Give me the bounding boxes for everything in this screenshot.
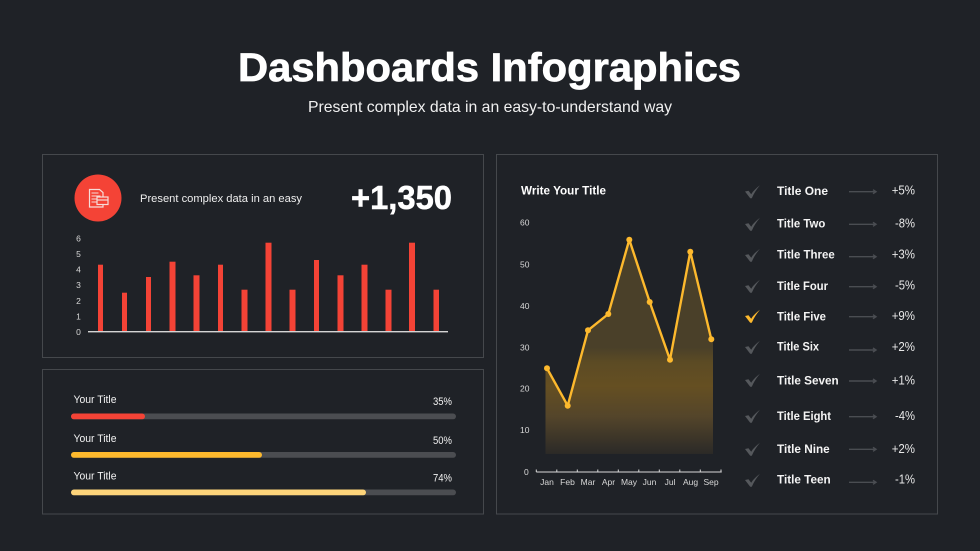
progress row 74% <box>71 470 456 495</box>
list row: Title Six <box>745 340 915 354</box>
list row: Title Seven <box>745 373 915 387</box>
y axis labels: 0 <box>76 327 81 337</box>
x axis <box>536 470 722 472</box>
y axis labels: 20 <box>520 384 530 394</box>
x axis labels: May <box>621 477 638 487</box>
y axis labels: 6 <box>76 234 81 244</box>
y axis labels: 5 <box>76 249 81 259</box>
y axis labels: 1 <box>76 312 81 322</box>
progress row 35% <box>71 394 456 419</box>
progress row 35%: Your Title <box>74 394 116 406</box>
list row: Title Three: Title Three <box>777 247 835 261</box>
list row: Title Seven: Title Seven <box>777 373 839 387</box>
list row: Title Four: -5% <box>895 278 915 292</box>
progress row 35%: 35% <box>433 396 452 408</box>
list row: Title Nine <box>745 442 915 456</box>
list row: Title Eight: Title Eight <box>777 409 831 423</box>
list row: Title Four <box>745 278 915 293</box>
list row: Title Five (highlighted): Title Five <box>777 309 826 323</box>
line <box>547 240 711 406</box>
list row: Title Two: Title Two <box>777 216 825 230</box>
panel: line chart and list <box>496 154 938 514</box>
list row: Title Six: Title Six <box>777 340 819 354</box>
area line chart <box>520 218 722 487</box>
list row: Title Two <box>745 216 915 231</box>
progress row 50%: 50% <box>433 435 452 447</box>
x axis labels: Jan <box>540 477 554 487</box>
x axis labels: Jul <box>665 477 676 487</box>
y axis labels <box>76 234 81 337</box>
list row: Title Four: Title Four <box>777 279 828 293</box>
x axis labels <box>540 477 719 487</box>
x axis labels: Jun <box>643 477 657 487</box>
list row: Title One <box>745 184 915 198</box>
y axis labels: 50 <box>520 260 530 270</box>
y axis labels: 2 <box>76 296 81 306</box>
bar chart <box>76 234 448 337</box>
x axis labels: Feb <box>560 477 575 487</box>
y axis labels: 40 <box>520 301 530 311</box>
data points <box>544 237 714 409</box>
list row: Title Seven: +1% <box>892 373 915 387</box>
chart heading: Write Your Title <box>521 184 606 198</box>
list row: Title Six: +2% <box>892 340 915 354</box>
y axis labels <box>520 218 530 477</box>
y axis labels: 4 <box>76 264 81 274</box>
list row: Title Three: +3% <box>892 247 915 261</box>
x axis labels: Aug <box>683 477 698 487</box>
list row: Title Eight: -4% <box>895 409 915 423</box>
axis line <box>88 331 448 332</box>
big number: +1,350 <box>351 179 452 216</box>
panel: bar chart summary <box>42 154 484 358</box>
subtitle: Present complex data in an easy-to-understand way <box>308 99 672 116</box>
list row: Title Two: -8% <box>895 216 915 230</box>
list row: Title Teen: -1% <box>895 472 915 486</box>
title: Dashboards Infographics <box>238 46 741 90</box>
list row: Title Eight <box>745 409 915 423</box>
bars <box>98 243 439 332</box>
list row: Title Nine: +2% <box>892 442 915 456</box>
y axis labels: 0 <box>524 467 529 477</box>
panel: progress bars <box>42 370 484 514</box>
y axis labels: 3 <box>76 280 81 290</box>
list row: Title One: Title One <box>777 184 828 198</box>
list row: Title Three <box>745 247 915 262</box>
y axis labels: 30 <box>520 342 530 352</box>
x axis labels: Sep <box>703 477 719 487</box>
progress row 50%: Your Title <box>74 433 116 445</box>
x axis labels: Apr <box>602 477 615 487</box>
list row: Title Teen <box>745 472 915 487</box>
list row: Title One: +5% <box>892 184 915 198</box>
progress row 74%: Your Title <box>74 470 116 482</box>
list row: Title Five (highlighted) <box>745 309 915 323</box>
y axis labels: 10 <box>520 425 530 435</box>
x axis labels: Mar <box>581 477 595 487</box>
list row: Title Nine: Title Nine <box>777 442 830 456</box>
y axis labels: 60 <box>520 218 530 228</box>
list row: Title Teen: Title Teen <box>777 472 831 486</box>
description text: Present complex data in an easy <box>140 193 303 205</box>
progress row 74%: 74% <box>433 472 452 484</box>
progress row 50% <box>71 433 456 458</box>
list row: Title Five (highlighted): +9% <box>892 309 915 323</box>
area fill <box>546 240 713 454</box>
icon: document and card <box>74 174 122 222</box>
